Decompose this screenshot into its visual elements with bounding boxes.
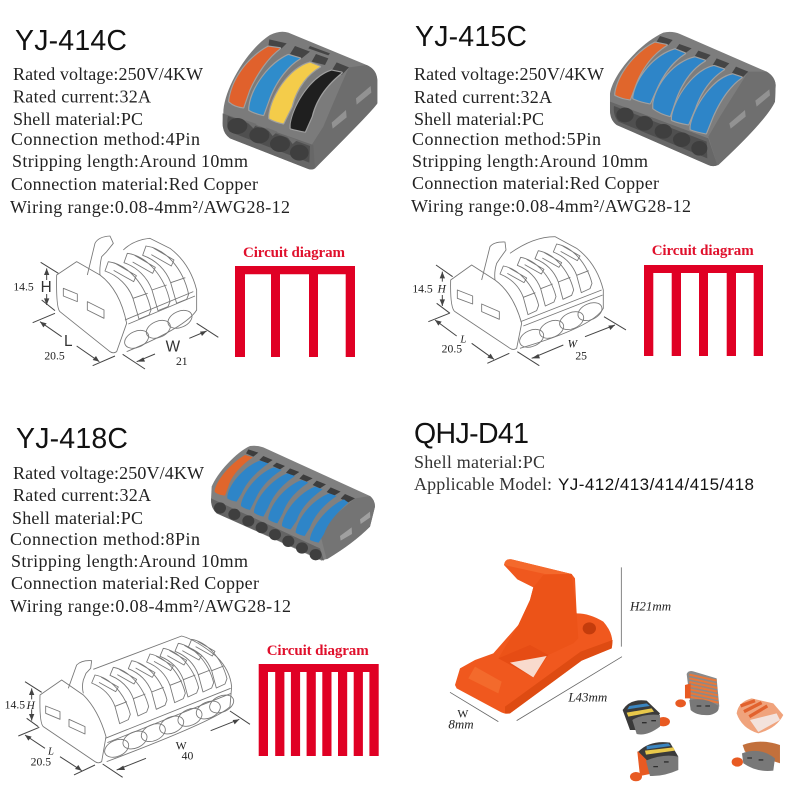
photo: five small connectors mounted on clips <box>623 671 783 781</box>
line drawing: 8-pole connector with dimensions: L <box>47 747 54 758</box>
spec text: YJ-418C: Connection material:Red Copper <box>11 573 259 593</box>
spec text: YJ-414C <box>10 64 290 217</box>
spec text: YJ-418C: Connection method:8Pin <box>10 529 200 549</box>
circuit diagram: 4 pin: Circuit diagram <box>243 245 346 261</box>
circuit diagram: 5 pin: Circuit diagram <box>652 243 754 259</box>
photo: orange mounting clip with dimensions: W <box>457 708 468 721</box>
line drawing: 8-pole connector with dimensions: 20.5 <box>31 755 51 768</box>
spec text: QHJ-D41: YJ-412/413/414/415/418 <box>558 475 754 494</box>
spec text: YJ-414C: Wiring range:0.08-4mm²/AWG28-12 <box>10 197 290 217</box>
spec text: YJ-415C: Connection method:5Pin <box>412 129 601 149</box>
spec text: YJ-414C: Connection material:Red Copper <box>11 174 258 194</box>
spec text: YJ-414C: Shell material:PC <box>13 109 143 129</box>
spec text: QHJ-D41: Applicable Model: <box>414 474 552 494</box>
spec text: YJ-414C: Connection method:4Pin <box>11 129 200 149</box>
line drawing: 5-pole connector with dimensions: L <box>459 335 466 346</box>
spec text: YJ-418C <box>10 463 291 616</box>
photo: orange mounting clip with dimensions <box>448 559 671 731</box>
spec text: YJ-418C: Shell material:PC <box>12 508 143 528</box>
line drawing: 4-pole connector with dimensions: 20.5 <box>44 350 65 363</box>
spec text: YJ-415C: Rated voltage:250V/4KW <box>414 64 604 84</box>
spec text: YJ-415C <box>411 64 691 216</box>
line drawing: 5-pole connector with dimensions: W <box>568 338 579 350</box>
spec text: YJ-418C: Rated voltage:250V/4KW <box>13 463 204 483</box>
line drawing: 5-pole connector with dimensions: H <box>437 284 447 296</box>
circuit diagram: 8 pin <box>259 643 379 756</box>
spec text: YJ-415C: Connection material:Red Copper <box>412 173 659 193</box>
panel: YJ-418C <box>5 423 379 777</box>
line drawing: 5-pole connector with dimensions: 20.5 <box>442 343 462 356</box>
panel: YJ-414C <box>10 25 377 369</box>
circuit diagram: 5 pin <box>644 243 763 356</box>
panel: YJ-415C <box>411 21 776 366</box>
line drawing: 4-pole connector with dimensions: W <box>166 338 181 355</box>
line drawing: 5-pole connector with dimensions: 14.5 <box>412 282 433 295</box>
photo: orange mounting clip with dimensions: H21mm <box>629 599 671 614</box>
spec text: YJ-414C: Rated current:32A <box>13 87 151 107</box>
spec text: QHJ-D41 <box>414 452 754 494</box>
circuit diagram: 8 pin: Circuit diagram <box>267 643 369 659</box>
line drawing: 5-pole connector with dimensions: 25 <box>575 349 587 362</box>
line drawing: 8-pole connector with dimensions: 14.5 <box>5 699 25 712</box>
line drawing: 4-pole connector with dimensions: 21 <box>176 355 188 368</box>
line drawing: 8-pole connector with dimensions <box>5 636 250 777</box>
title: YJ-414C: YJ-414C <box>15 25 127 57</box>
spec text: YJ-415C: Shell material:PC <box>414 109 544 129</box>
spec text: YJ-414C: Rated voltage:250V/4KW <box>13 64 203 84</box>
title: QHJ-D41: QHJ-D41 <box>414 418 529 450</box>
spec text: YJ-418C: Rated current:32A <box>13 485 151 505</box>
line drawing: 4-pole connector with dimensions: 14.5 <box>13 281 34 294</box>
title: YJ-415C: YJ-415C <box>415 21 527 53</box>
line drawing: 4-pole connector with dimensions: H <box>41 279 52 296</box>
line drawing: 4-pole connector with dimensions: L <box>64 333 73 350</box>
spec text: YJ-414C: Stripping length:Around 10mm <box>12 151 248 171</box>
photo: 8-pole connector with one orange and seven blue levers <box>211 446 375 561</box>
spec text: YJ-415C: Wiring range:0.08-4mm²/AWG28-12 <box>411 196 691 216</box>
line drawing: 5-pole connector with dimensions <box>412 237 626 366</box>
photo: orange mounting clip with dimensions: 8mm <box>448 716 474 731</box>
spec text: YJ-418C: Wiring range:0.08-4mm²/AWG28-12 <box>10 596 291 616</box>
panel: QHJ-D41 <box>414 418 783 781</box>
spec text: YJ-418C: Stripping length:Around 10mm <box>11 551 248 571</box>
photo: orange mounting clip with dimensions: L43mm <box>567 690 607 705</box>
line drawing: 4-pole connector with dimensions <box>13 236 218 369</box>
spec text: YJ-415C: Rated current:32A <box>414 87 552 107</box>
title: YJ-418C: YJ-418C <box>16 423 128 455</box>
spec text: YJ-415C: Stripping length:Around 10mm <box>412 151 648 171</box>
photo: 4-pole connector with orange, blue, yellow and black levers <box>223 32 377 169</box>
photo: 5-pole connector with one orange and four blue levers <box>610 32 776 166</box>
spec text: QHJ-D41: Shell material:PC <box>414 452 545 472</box>
line drawing: 8-pole connector with dimensions: 40 <box>182 750 193 763</box>
circuit diagram: 4 pin <box>235 245 355 357</box>
line drawing: 8-pole connector with dimensions: H <box>26 700 36 712</box>
line drawing: 8-pole connector with dimensions: W <box>176 739 187 752</box>
